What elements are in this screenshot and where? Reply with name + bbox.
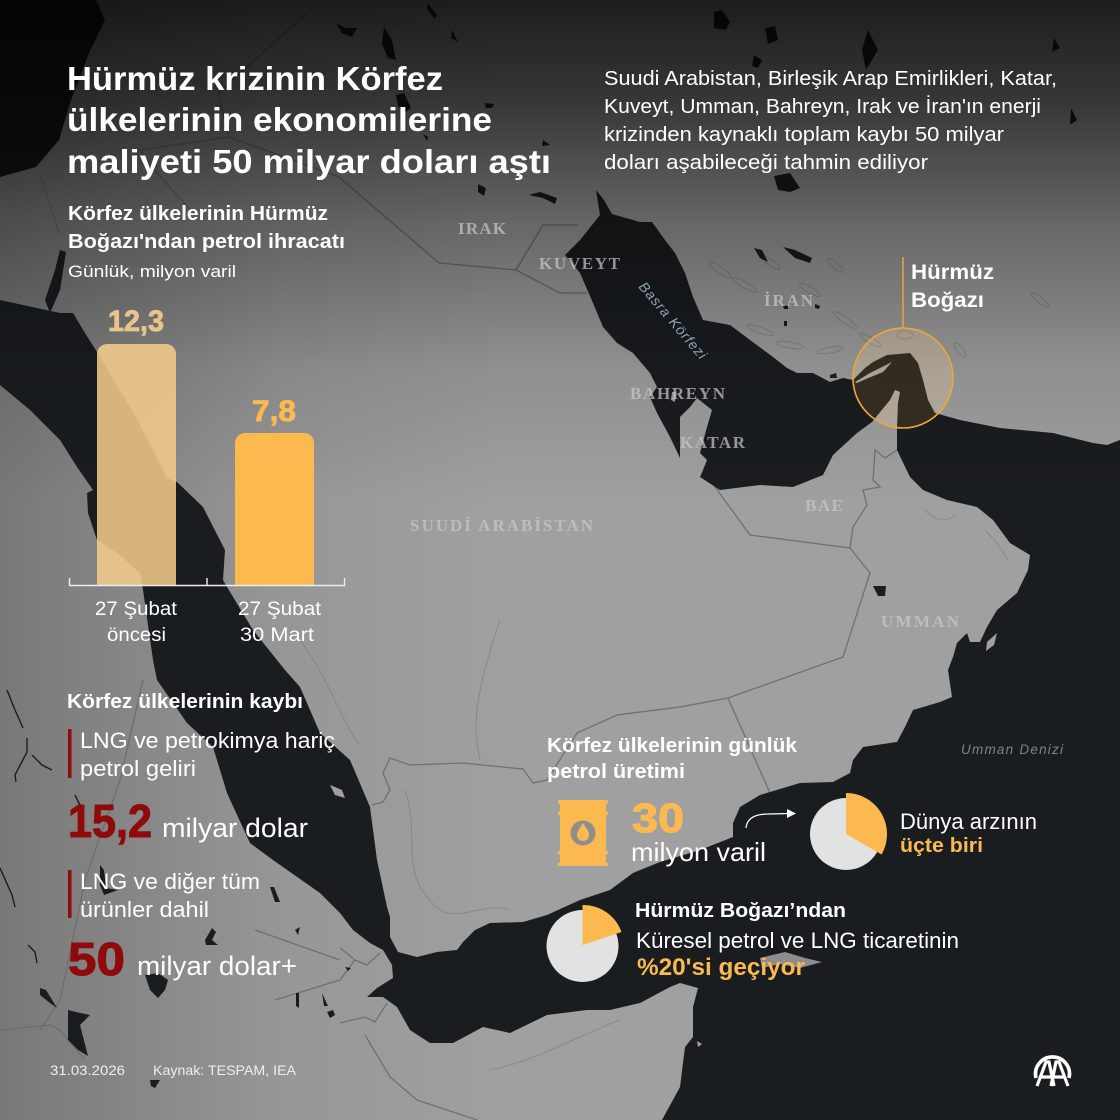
value 12,3: 12,3 [108,305,164,338]
chart heading: Günlük, milyon varil [68,262,236,281]
red marker 2 [68,870,72,918]
arrow [746,809,796,828]
value 30: 30 [632,795,684,841]
production heading: petrol üretimi [547,761,685,783]
mediterranean [0,0,105,177]
value 7,8: 7,8 [252,395,296,428]
country labels: SUUDİ ARABİSTAN [410,516,594,535]
production heading: Körfez ülkelerinin günlük [547,735,798,757]
panel: Körfez ülkelerinin kaybı [67,691,335,985]
country labels: BAHREYN [630,384,726,403]
intro paragraph: doları aşabileceği tahmin ediliyor [604,152,928,174]
x labels: 27 Şubat [95,599,178,620]
panel: günlük petrol üretimi [547,735,1037,870]
intro paragraph: Suudi Arabistan, Birleşik Arap Emirlikleri, Katar, [604,68,1057,90]
pie: %20 [546,905,622,982]
callout text: Hürmüz [911,261,994,284]
title [67,60,551,180]
intro paragraph: Kuveyt, Umman, Bahreyn, Irak ve İran'ın enerji [604,95,1041,118]
sea label: Umman Denizi: Umman Denizi [961,742,1064,757]
trade text: Küresel petrol ve LNG ticaretinin [636,928,959,953]
intro paragraph [604,68,1057,174]
text: tüm ürünler: ürünler dahil [80,897,209,922]
text: tüm ürünler: LNG ve diğer tüm [80,869,260,894]
unit milyar dolar: milyar dolar [162,813,308,843]
text: üçte biri: üçte biri [900,835,983,857]
icon: AA logo [1036,1057,1070,1086]
text: petrol geliri [80,728,335,781]
unit milyon varil: milyon varil [631,837,766,867]
country labels: IRAK [458,219,507,238]
title: ülkelerinin ekonomilerine [67,101,492,138]
country labels: KATAR [680,433,746,452]
country labels [410,219,960,631]
loss heading: Körfez ülkelerinin kaybı [67,691,303,713]
sea label: Basra Körfezi: Basra Körfezi [636,279,711,363]
callout: Hürmüz Boğazı circle [853,257,994,428]
chart heading: Boğazı'ndan petrol ihracatı [68,231,345,253]
pie: üçte biri [810,793,887,870]
country labels: KUVEYT [539,254,621,273]
red marker 1 [68,729,72,778]
text: petrol geliri: LNG ve petrokimya hariç [80,728,335,753]
terrain streaks [300,253,1050,1070]
production heading [547,735,798,783]
bar: 27 Şubat 30 Mart [235,433,314,586]
x labels: 27 Şubat [238,599,322,620]
trade highlight: %20'si geçiyor [637,954,805,981]
title: Hürmüz krizinin Körfez [67,60,443,97]
callout text [911,261,994,312]
socotra island [760,952,822,968]
unit milyar dolar+: milyar dolar+ [137,951,297,981]
chart heading [68,203,345,281]
small islands [330,362,997,1047]
intro paragraph: krizinden kaynaklı toplam kaybı 50 milyar [604,124,1004,146]
text: Dünya arzının: Dünya arzının [900,809,1037,834]
chart heading: Körfez ülkelerinin Hürmüz [68,203,328,225]
panel: Hürmüz Boğazı ticaret [546,900,959,982]
bar chart: petrol ihracatı [68,203,345,646]
icon: oil barrel [558,800,608,866]
country labels: İRAN [764,291,814,310]
bar: 27 Şubat öncesi [97,344,176,586]
x labels [95,599,322,646]
x labels: 30 Mart [240,625,315,646]
callout text: Boğazı [911,289,984,312]
value 15,2: 15,2 [68,795,152,847]
footer date: 31.03.2026 [50,1062,125,1078]
text: tüm ürünler [80,869,260,922]
trade heading: Hürmüz Boğazı’ndan [635,900,846,922]
x labels: öncesi [107,625,166,646]
value 50: 50 [68,933,125,985]
lakes and islands [382,27,396,60]
title: maliyeti 50 milyar doları aştı [67,143,551,180]
country labels: UMMAN [881,612,960,631]
axis [70,578,344,586]
text: petrol geliri: petrol geliri [80,756,196,781]
country labels: BAE [805,496,843,515]
borders [0,13,897,1120]
footer source: Kaynak: TESPAM, IEA [153,1062,297,1078]
